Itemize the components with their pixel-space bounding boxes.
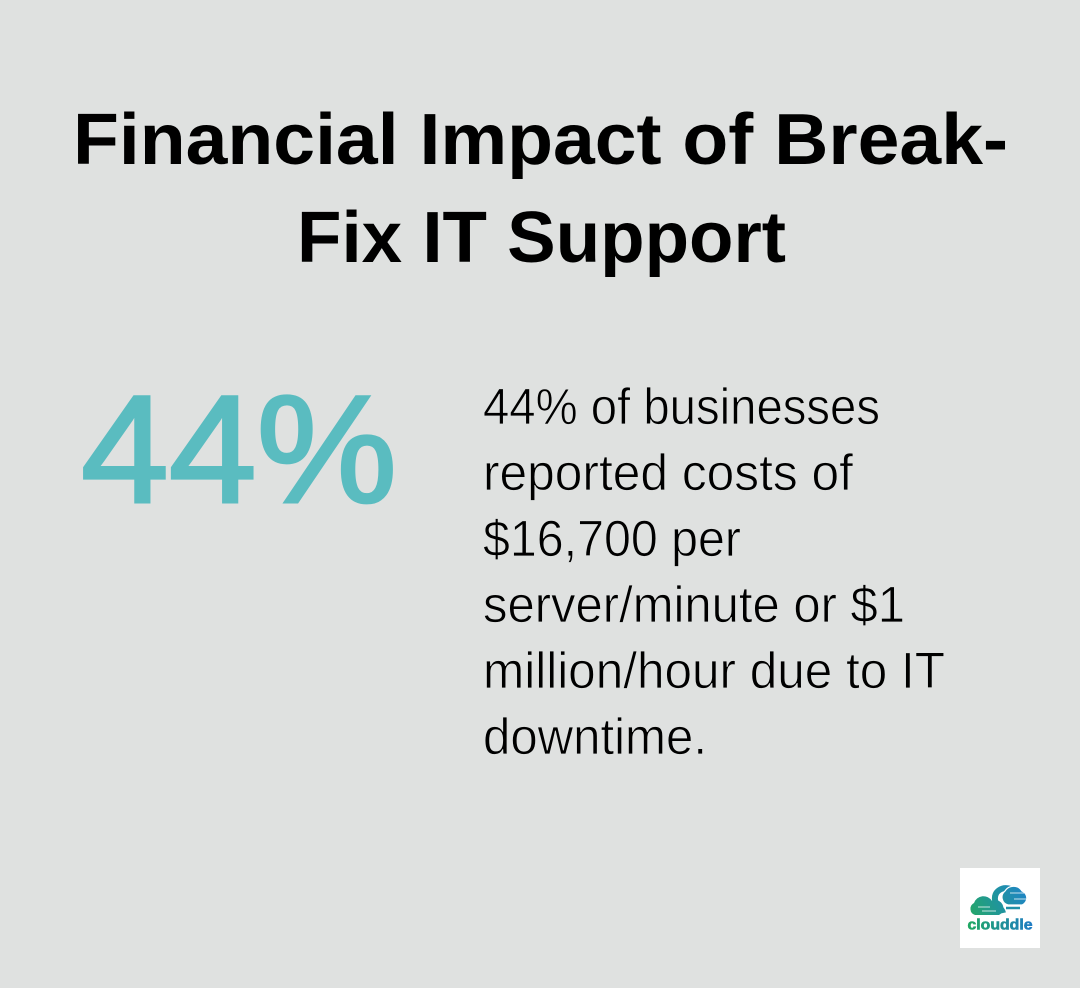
big statistic: 44%: 44% bbox=[81, 364, 397, 535]
description text bbox=[483, 378, 945, 765]
icon: left cloud bbox=[970, 896, 1003, 915]
description text: million/hour due to IT bbox=[483, 642, 945, 699]
title: Fix IT Support bbox=[297, 198, 786, 278]
icon: right cloud bbox=[1002, 886, 1027, 905]
logo wordmark: clouddle bbox=[968, 916, 1032, 934]
icon: swirl behind the clouds bbox=[995, 888, 1011, 913]
title: Financial Impact of Break- bbox=[73, 100, 1008, 180]
description text: downtime. bbox=[483, 708, 707, 765]
description text: server/minute or $1 bbox=[483, 576, 905, 633]
logo: clouddle bbox=[960, 868, 1040, 948]
icon: circuit lines bbox=[978, 893, 1026, 911]
description text: reported costs of bbox=[483, 444, 854, 501]
description text: $16,700 per bbox=[483, 510, 741, 567]
description text: 44% of businesses bbox=[483, 378, 880, 435]
title bbox=[73, 100, 1008, 278]
